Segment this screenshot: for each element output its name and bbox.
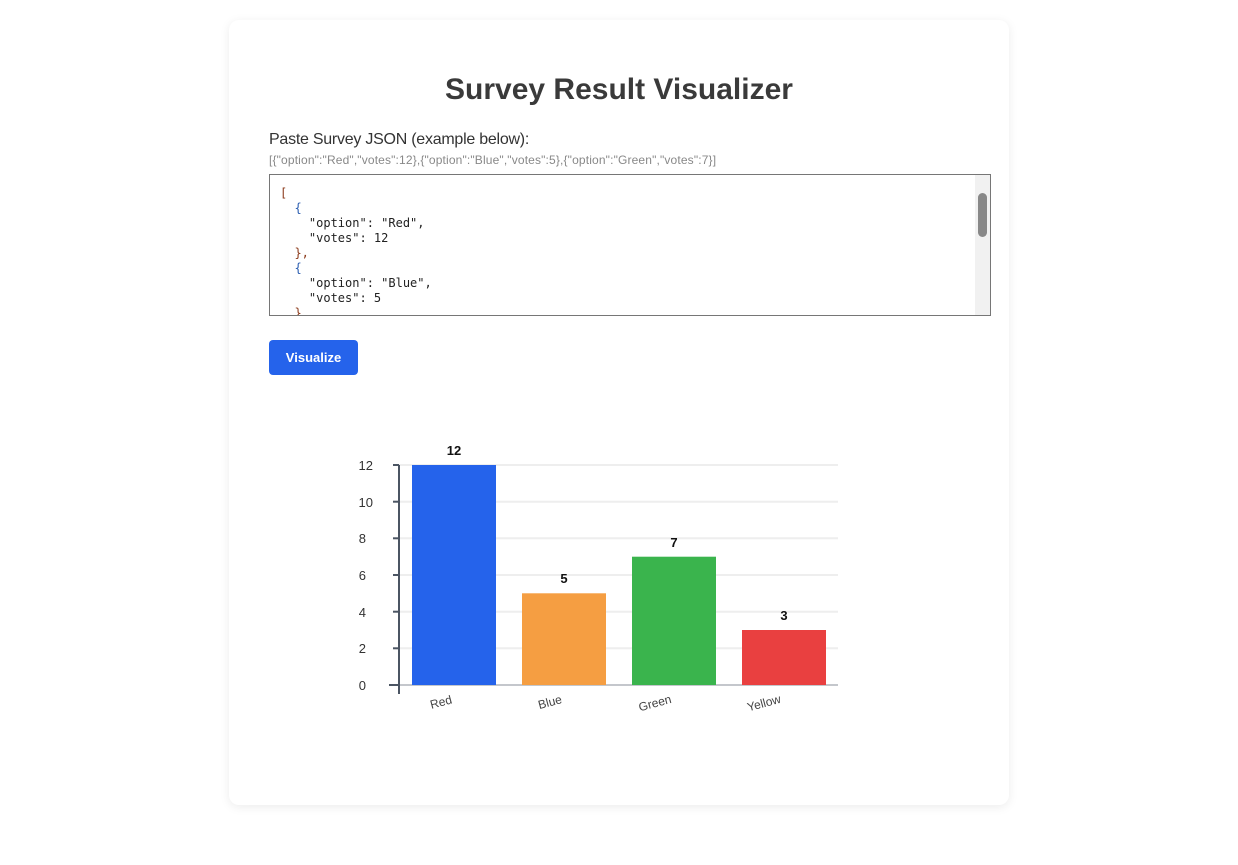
- bar chart: 7: [670, 535, 678, 550]
- bar chart: 8: [359, 531, 366, 546]
- bar chart: 12: [359, 458, 373, 473]
- bar chart: Green: [637, 692, 673, 714]
- bar chart: 6: [359, 568, 366, 583]
- bar chart: 4: [359, 605, 366, 620]
- label: Paste Survey JSON (example below):: [269, 131, 529, 148]
- textarea: [ { "option": "Red", "votes": 12 }, { "option": "Blue", "votes": 5 }: [280, 186, 432, 316]
- button: visualize: Visualize: [286, 350, 341, 365]
- scrollbar: [975, 175, 990, 315]
- bar chart: Red: [429, 693, 453, 712]
- panel: card: [229, 20, 1009, 805]
- bar chart: 3: [780, 608, 788, 623]
- title: Survey Result Visualizer: [445, 73, 793, 106]
- example text: [{"option":"Red","votes":12},{"option":"Blue","votes":5},{"option":"Green","votes":7}]: [269, 153, 716, 167]
- bar chart: Blue: [537, 692, 564, 712]
- bar chart: 12: [447, 443, 461, 458]
- bar chart: 2: [359, 641, 366, 656]
- bar chart: 10: [359, 495, 373, 510]
- bar chart: Yellow: [746, 692, 783, 714]
- bar chart: 5: [560, 571, 568, 586]
- textarea: [269, 174, 991, 316]
- button: visualize: [269, 340, 358, 375]
- bar chart: 0: [359, 678, 366, 693]
